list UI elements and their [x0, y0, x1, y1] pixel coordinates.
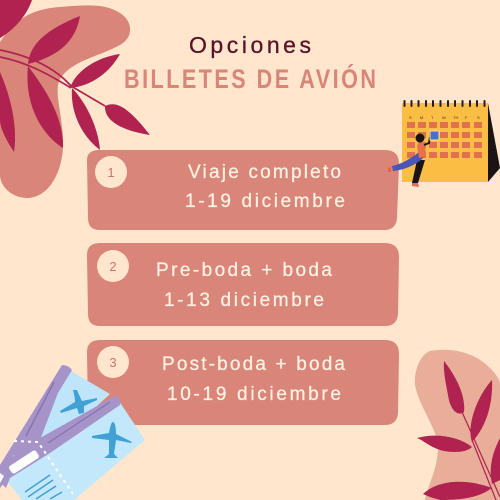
option 1 text: Viaje completo — [188, 162, 341, 183]
option 3 text — [162, 354, 345, 405]
subtitle: BILLETES DE AVIÓN — [124, 64, 376, 95]
icon: calendar with woman: F — [465, 115, 468, 120]
option 1 text — [185, 162, 345, 212]
number badge 1: 1 — [107, 165, 115, 180]
title: Opciones — [189, 32, 311, 58]
option 2 text — [156, 260, 332, 311]
decorative blob and leaves: bottom right — [415, 350, 500, 500]
white slot — [8, 450, 40, 474]
barcode lines — [25, 475, 62, 499]
icon: calendar with woman — [388, 101, 500, 187]
number badge 3: 3 — [109, 355, 117, 370]
option 2 text: Pre-boda + boda — [156, 260, 332, 281]
plane front — [92, 422, 132, 458]
icon: calendar with woman: W — [442, 115, 446, 120]
option 3 text: Post-boda + boda — [162, 354, 345, 375]
number badge 1 — [95, 156, 127, 188]
decorative blob and leaves: top left — [0, 0, 150, 198]
number badge 3 — [97, 346, 129, 378]
icon: plane tickets — [0, 365, 145, 500]
back ticket — [30, 367, 110, 450]
icon: calendar with woman: T — [431, 115, 434, 120]
icon: calendar with woman: TH — [453, 115, 458, 120]
woman — [412, 160, 425, 183]
option card 1 — [87, 150, 399, 230]
branch — [0, 50, 105, 106]
icon: calendar with woman: M — [420, 115, 423, 120]
icon: calendar with woman: S — [477, 115, 480, 120]
icon: calendar with woman: S — [409, 115, 412, 120]
option 2 text: 1-13 diciembre — [164, 290, 324, 311]
option card 2 — [87, 243, 399, 326]
option card 3 — [87, 340, 399, 425]
option 3 text: 10-19 diciembre — [167, 384, 341, 405]
plane back — [60, 390, 97, 414]
leaves — [0, 0, 32, 38]
number badge 2 — [97, 250, 129, 282]
front ticket — [0, 398, 145, 500]
option 1 text: 1-19 diciembre — [185, 191, 345, 212]
perforation — [14, 441, 73, 494]
number badge 2: 2 — [109, 259, 117, 274]
